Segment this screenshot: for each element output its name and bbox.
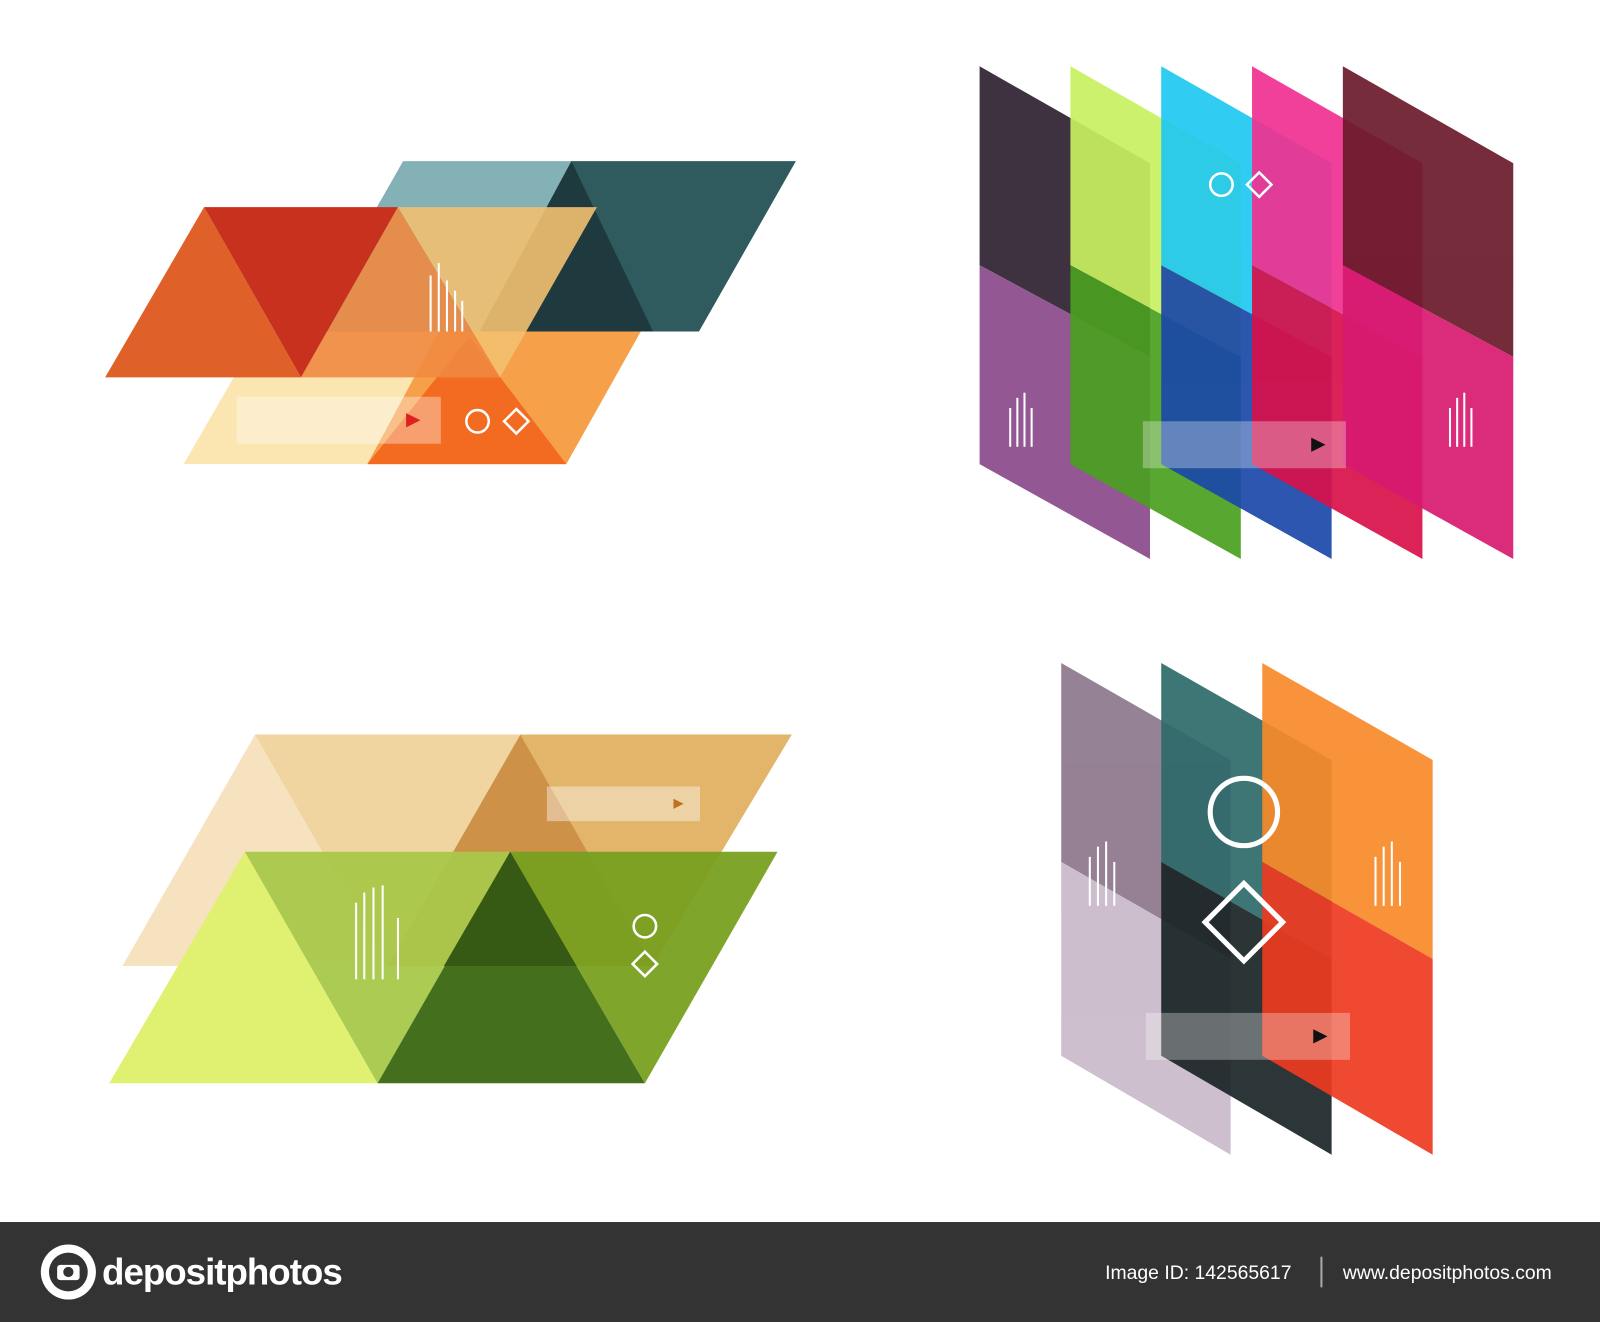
icons: circle and diamond	[633, 915, 657, 976]
icon: bars left	[1010, 393, 1032, 447]
text box with arrow	[548, 787, 699, 820]
icon: bars	[431, 263, 462, 332]
image id: Image ID: 142565617	[1105, 1262, 1291, 1284]
icon: bars right	[1376, 842, 1400, 906]
icon: bars right	[1450, 393, 1471, 447]
text box with arrow	[1144, 422, 1345, 467]
icons: circle and diamond	[1210, 172, 1271, 197]
logo text: depositphotos	[102, 1251, 342, 1292]
icon: bars	[356, 885, 398, 979]
icon: bars left	[1090, 842, 1114, 906]
footer bar	[0, 1222, 1600, 1322]
text box with arrow	[1147, 1014, 1349, 1059]
logo icon	[41, 1244, 96, 1300]
panel: bottom-right vertical strips	[1061, 663, 1433, 1155]
panel: top-left horizontal shapes	[105, 161, 796, 464]
icons: circle and diamond	[466, 409, 529, 434]
panel: bottom-left horizontal shapes	[109, 734, 792, 1083]
panel: top-right vertical strips	[980, 66, 1513, 559]
icons: big circle and diamond	[1205, 778, 1283, 961]
text box with arrow	[238, 398, 440, 443]
website: www.depositphotos.com	[1342, 1262, 1552, 1284]
